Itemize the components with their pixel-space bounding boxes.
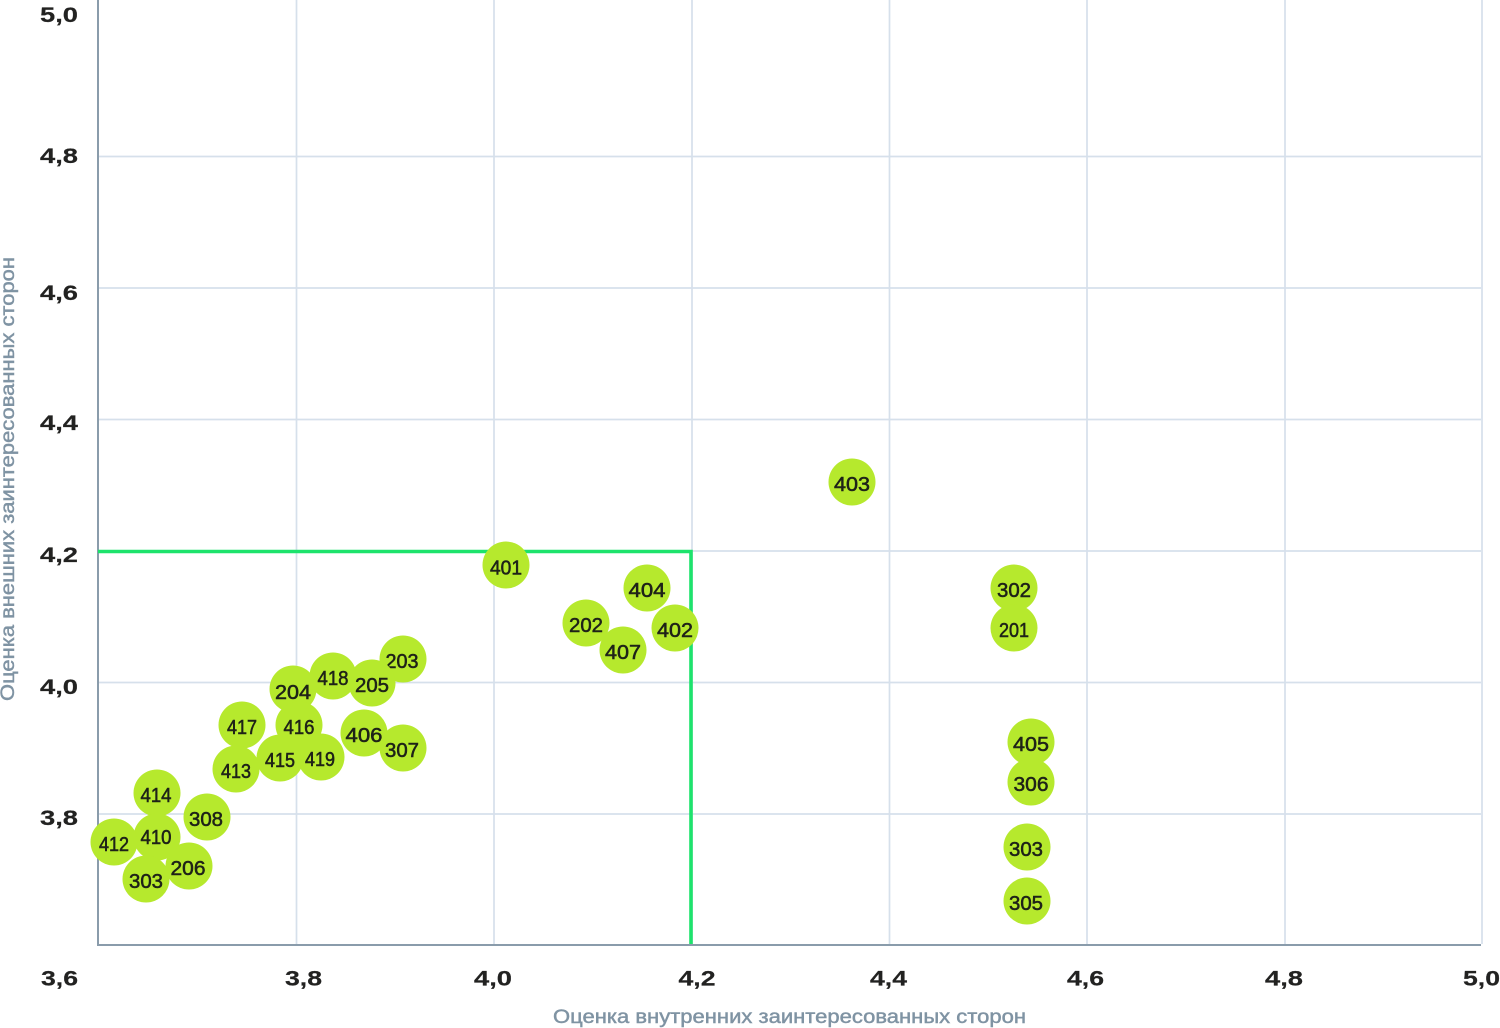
bubble 407: 407 bbox=[605, 642, 641, 664]
bubble 413: 413 bbox=[221, 761, 251, 783]
bubble 307: 307 bbox=[385, 740, 419, 762]
bubble 401 bbox=[482, 542, 530, 588]
bubble 201 bbox=[990, 604, 1038, 652]
x axis tick labels: 4,2 bbox=[678, 968, 716, 990]
bubble 415: 415 bbox=[265, 750, 295, 772]
bubble 203: 203 bbox=[386, 651, 418, 673]
bubble 403 bbox=[828, 458, 876, 506]
x axis tick labels: 4,6 bbox=[1067, 968, 1104, 990]
bubble 416 bbox=[276, 702, 322, 748]
bubble 419: 419 bbox=[305, 749, 335, 771]
bubble 305 bbox=[1004, 878, 1050, 924]
bubble 305: 305 bbox=[1009, 893, 1043, 915]
bubble 202 bbox=[562, 600, 610, 646]
bubble 417 bbox=[218, 702, 266, 748]
y axis tick labels: 3,8 bbox=[40, 807, 78, 830]
x axis tick labels: 5,0 bbox=[1463, 968, 1500, 990]
bubble 306 bbox=[1008, 758, 1054, 806]
bubble 303 right: 303 bbox=[1009, 839, 1043, 861]
bubble 303 right bbox=[1004, 824, 1050, 870]
bubble 412: 412 bbox=[99, 834, 129, 856]
bubble 412 bbox=[90, 818, 138, 866]
x axis tick labels: 3,6 bbox=[41, 968, 78, 990]
y axis tick labels: 4,8 bbox=[40, 145, 78, 168]
bubble 205 bbox=[348, 660, 396, 706]
bubble 206: 206 bbox=[170, 858, 206, 880]
bubble 414 bbox=[134, 770, 180, 816]
y axis tick labels bbox=[40, 4, 78, 830]
bubble 413 bbox=[212, 746, 260, 792]
bubble 410: 410 bbox=[140, 827, 172, 849]
bubble 417: 417 bbox=[227, 717, 257, 739]
bubble 205: 205 bbox=[355, 675, 389, 697]
bubble 308: 308 bbox=[189, 809, 223, 831]
bubble 307 bbox=[380, 724, 426, 772]
bubble 204: 204 bbox=[275, 682, 311, 704]
x axis tick labels: 4,0 bbox=[474, 968, 512, 990]
y axis tick labels: 5,0 bbox=[40, 4, 78, 27]
bubble 404 bbox=[624, 564, 670, 612]
data bubbles bbox=[90, 458, 1054, 924]
bubble 406 bbox=[340, 710, 388, 756]
y axis tick labels: 4,4 bbox=[40, 412, 78, 435]
x axis tick labels bbox=[41, 968, 1500, 990]
bubble 414: 414 bbox=[140, 785, 172, 807]
y axis tick labels: 4,0 bbox=[40, 676, 78, 699]
x axis tick labels: 4,8 bbox=[1265, 968, 1303, 990]
bubble 204 bbox=[270, 666, 316, 712]
x axis tick labels: 4,4 bbox=[870, 968, 907, 990]
bubble 303 left bbox=[122, 856, 170, 902]
bubble 418 bbox=[310, 652, 356, 700]
bubble 402: 402 bbox=[657, 620, 693, 642]
bubble 415 bbox=[256, 734, 304, 782]
bubble 201: 201 bbox=[999, 620, 1029, 642]
threshold box at 4.2 bbox=[98, 552, 691, 944]
bubble 206 bbox=[166, 842, 212, 890]
x axis tick labels: 3,8 bbox=[285, 968, 322, 990]
bubble 403: 403 bbox=[834, 474, 870, 496]
bubble 407 bbox=[600, 626, 646, 674]
bubble 404: 404 bbox=[628, 580, 666, 602]
bubble 405 bbox=[1008, 718, 1054, 766]
y axis tick labels: 4,6 bbox=[40, 282, 78, 305]
bubble 406: 406 bbox=[346, 725, 382, 747]
bubble 202: 202 bbox=[569, 615, 603, 637]
bubble 401: 401 bbox=[490, 558, 522, 580]
bubble 303 left: 303 bbox=[129, 871, 163, 893]
bubble 203 bbox=[380, 636, 426, 682]
x axis title: Оценка внутренних заинтересованных сторон bbox=[553, 1007, 1026, 1028]
y axis tick labels: 4,2 bbox=[40, 544, 78, 567]
bubble 402 bbox=[652, 604, 698, 652]
bubble 418: 418 bbox=[318, 668, 348, 690]
bubble 410 bbox=[134, 814, 180, 860]
bubble 308 bbox=[184, 794, 230, 840]
bubble 416: 416 bbox=[284, 717, 314, 739]
bubble 306: 306 bbox=[1014, 774, 1048, 796]
bubble 302 bbox=[990, 564, 1038, 612]
bubble 419 bbox=[298, 734, 344, 780]
bubble 302: 302 bbox=[997, 580, 1031, 602]
bubble 405: 405 bbox=[1013, 734, 1049, 756]
